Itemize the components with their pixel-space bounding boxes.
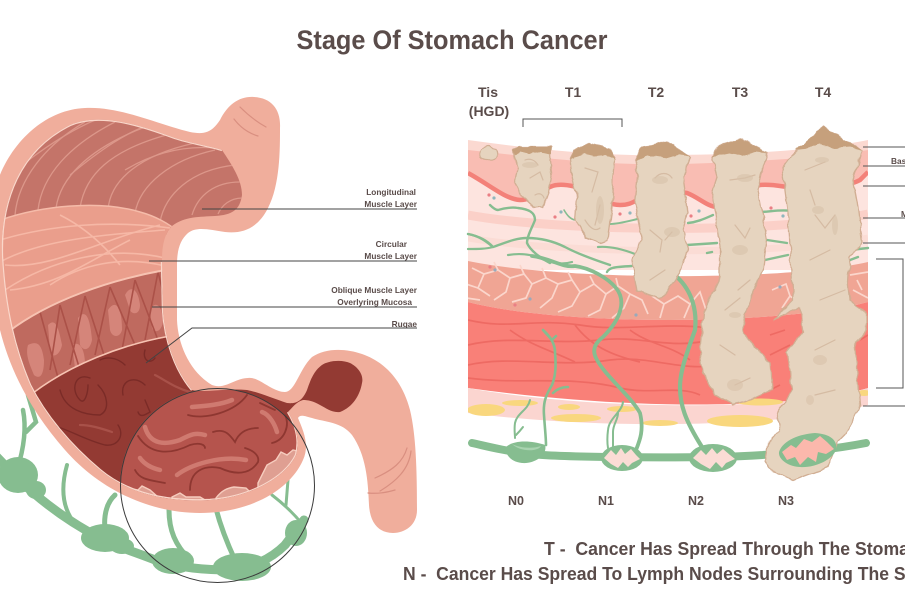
label: longitudinal muscle layer: Muscle Layer	[364, 199, 418, 209]
label: circular muscle layer: Muscle Layer	[364, 251, 418, 261]
tumour: T3	[700, 139, 772, 405]
label: circular muscle layer	[149, 239, 418, 261]
mucosa bands	[468, 140, 868, 164]
label: rugae	[146, 319, 417, 363]
label: oblique muscle layer	[152, 285, 418, 307]
stomach labels	[146, 187, 418, 363]
lymph node: N3	[779, 433, 836, 467]
label: circular muscle layer: Circular	[376, 239, 408, 249]
tumour: T1 deep	[570, 143, 615, 243]
pale stripes	[468, 214, 868, 228]
node labels: N3	[778, 494, 794, 508]
muscularis propria	[468, 302, 868, 405]
tumour: Tis	[480, 146, 497, 161]
bracket: T1	[523, 119, 622, 127]
label: rugae: Rugae	[392, 319, 417, 329]
stomach illustration	[0, 97, 417, 582]
stomach wall cross-section	[466, 127, 871, 480]
longitudinal layer	[2, 120, 242, 235]
wall layer labels (cropped)	[891, 156, 905, 219]
stomach lumen layers	[2, 120, 362, 500]
stage labels: Tis	[478, 84, 498, 100]
oblique layer	[8, 270, 172, 396]
submucosa	[468, 261, 868, 320]
muscularis mucosae wave	[468, 172, 868, 207]
tumour edge	[257, 449, 297, 488]
node labels: N2	[688, 494, 704, 508]
lymph node: N2	[689, 444, 737, 472]
magnified lens interior	[120, 390, 298, 500]
circular layer	[0, 205, 178, 332]
stage labels	[469, 84, 831, 119]
vessel to N2	[677, 277, 702, 447]
node labels	[508, 494, 794, 508]
lamina below wave	[468, 172, 868, 270]
adipose layer	[468, 388, 868, 424]
lens circle	[120, 388, 314, 582]
stage labels: T3	[732, 84, 748, 100]
stage labels: (HGD)	[469, 103, 509, 119]
tumours	[480, 127, 867, 480]
lymph trunk	[472, 443, 866, 457]
label: longitudinal muscle layer	[202, 187, 418, 209]
tumour: T2	[632, 141, 690, 298]
vessel to N1	[532, 256, 642, 450]
small branches to N1	[607, 402, 623, 448]
tumour: T4	[765, 127, 867, 480]
title: Stage Of Stomach Cancer	[296, 25, 608, 55]
lymph network behind stomach	[0, 395, 307, 581]
tumour texture	[525, 159, 845, 395]
lymph vessels	[468, 205, 868, 457]
label: oblique muscle layer: Oblique Muscle Layer	[331, 285, 418, 295]
tumour: T1 superficial	[513, 147, 552, 208]
node labels: N1	[598, 494, 614, 508]
stage labels: T2	[648, 84, 664, 100]
lymph node: N0	[505, 442, 545, 463]
wall layer leader lines	[863, 147, 905, 406]
label: oblique muscle layer: Overlyring Mucosa	[337, 297, 412, 307]
rugae layer	[30, 336, 370, 510]
label: longitudinal muscle layer: Longitudinal	[366, 187, 416, 197]
lymph node: N1	[601, 445, 643, 471]
stage labels: T4	[815, 84, 831, 100]
vessel to N0	[543, 330, 568, 445]
cells	[487, 193, 785, 317]
icon: wall folds	[234, 107, 411, 493]
stage labels: T1	[565, 84, 581, 100]
node labels: N0	[508, 494, 524, 508]
stomach outer wall	[0, 97, 417, 533]
